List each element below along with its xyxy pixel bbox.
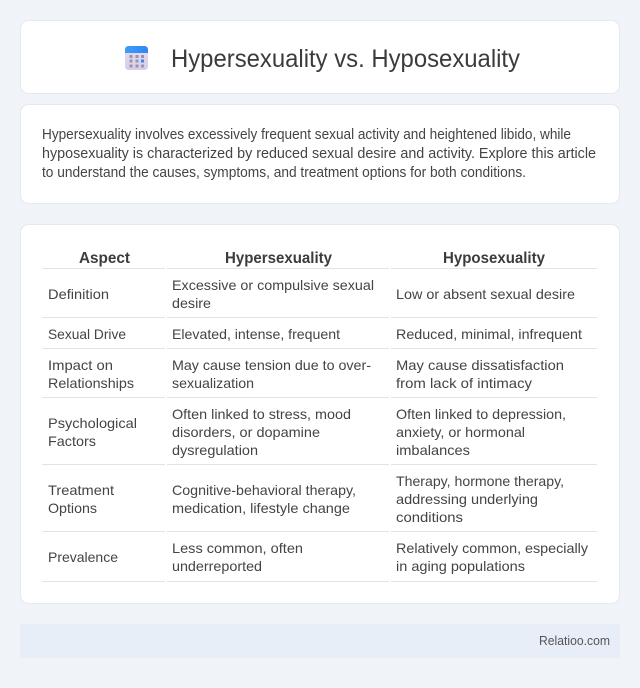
table row: Impact on Relationships: from lack of intimacy <box>396 375 532 391</box>
table row: Definition <box>48 277 575 311</box>
text block: intro paragraph <box>42 127 596 181</box>
panel: header card <box>20 20 620 94</box>
text block: intro paragraph: Hypersexuality involves excessively frequent sexual activity and heightened libido, while <box>42 127 571 143</box>
table row: Psychological Factors: Often linked to depression, <box>396 406 566 422</box>
table row: Treatment Options: conditions <box>396 509 463 525</box>
footer bar <box>20 624 620 658</box>
table row: Definition: Excessive or compulsive sexual <box>172 277 374 293</box>
table header row <box>79 250 545 267</box>
table header row: Hyposexuality <box>443 250 545 267</box>
table row: Impact on Relationships <box>48 357 564 391</box>
table row: Treatment Options: Treatment <box>48 482 114 498</box>
table row: Definition: Low or absent sexual desire <box>396 286 575 302</box>
table row: Psychological Factors: anxiety, or hormonal <box>396 424 525 440</box>
table row: Psychological Factors: Often linked to stress, mood <box>172 406 351 422</box>
table row: Psychological Factors: disorders, or dopamine <box>172 424 320 440</box>
table row: Psychological Factors: Factors <box>48 433 96 449</box>
table row: Treatment Options: medication, lifestyle change <box>172 500 350 516</box>
table row: Prevalence: underreported <box>172 558 262 574</box>
table row: Treatment Options <box>48 473 564 525</box>
table row: Prevalence: Less common, often <box>172 540 303 556</box>
table row: Impact on Relationships: sexualization <box>172 375 254 391</box>
table row: Prevalence <box>48 540 588 574</box>
table row: Sexual Drive: Reduced, minimal, infrequent <box>396 326 582 342</box>
text block: intro paragraph: hyposexuality is characterized by reduced sexual desire and activity. Explore this article <box>42 146 596 162</box>
table row: Impact on Relationships: May cause tension due to over- <box>172 357 371 373</box>
table row: Sexual Drive: Sexual Drive <box>48 326 126 342</box>
table row: Treatment Options: Therapy, hormone therapy, <box>396 473 564 489</box>
panel: intro card <box>20 104 620 204</box>
table header row: Aspect <box>79 250 130 267</box>
footer text: Relatioo.com <box>539 634 610 648</box>
table row: Prevalence: in aging populations <box>396 558 525 574</box>
table row: Prevalence: Relatively common, especially <box>396 540 588 556</box>
table row: Sexual Drive <box>48 326 582 342</box>
table row: Psychological Factors <box>48 406 566 458</box>
table row: Treatment Options: Options <box>48 500 97 516</box>
table row: Treatment Options: Cognitive-behavioral therapy, <box>172 482 356 498</box>
table row: Impact on Relationships: Impact on <box>48 357 113 373</box>
table row: Treatment Options: addressing underlying <box>396 491 538 507</box>
table row: Sexual Drive: Elevated, intense, frequent <box>172 326 340 342</box>
table row: Definition: Definition <box>48 286 109 302</box>
table row: Psychological Factors: dysregulation <box>172 442 258 458</box>
table row: Definition: desire <box>172 295 211 311</box>
text block: intro paragraph: to understand the causes, symptoms, and treatment options for both conditions. <box>42 165 526 181</box>
table row: Impact on Relationships: Relationships <box>48 375 134 391</box>
icon: calendar <box>125 46 148 70</box>
table row: Impact on Relationships: May cause dissatisfaction <box>396 357 564 373</box>
table header row: Hypersexuality <box>225 250 332 267</box>
panel: comparison table card <box>20 224 620 604</box>
table row: Psychological Factors: Psychological <box>48 415 137 431</box>
table row: Prevalence: Prevalence <box>48 549 118 565</box>
title: Hypersexuality vs. Hyposexuality <box>171 45 520 73</box>
table row: Psychological Factors: imbalances <box>396 442 470 458</box>
